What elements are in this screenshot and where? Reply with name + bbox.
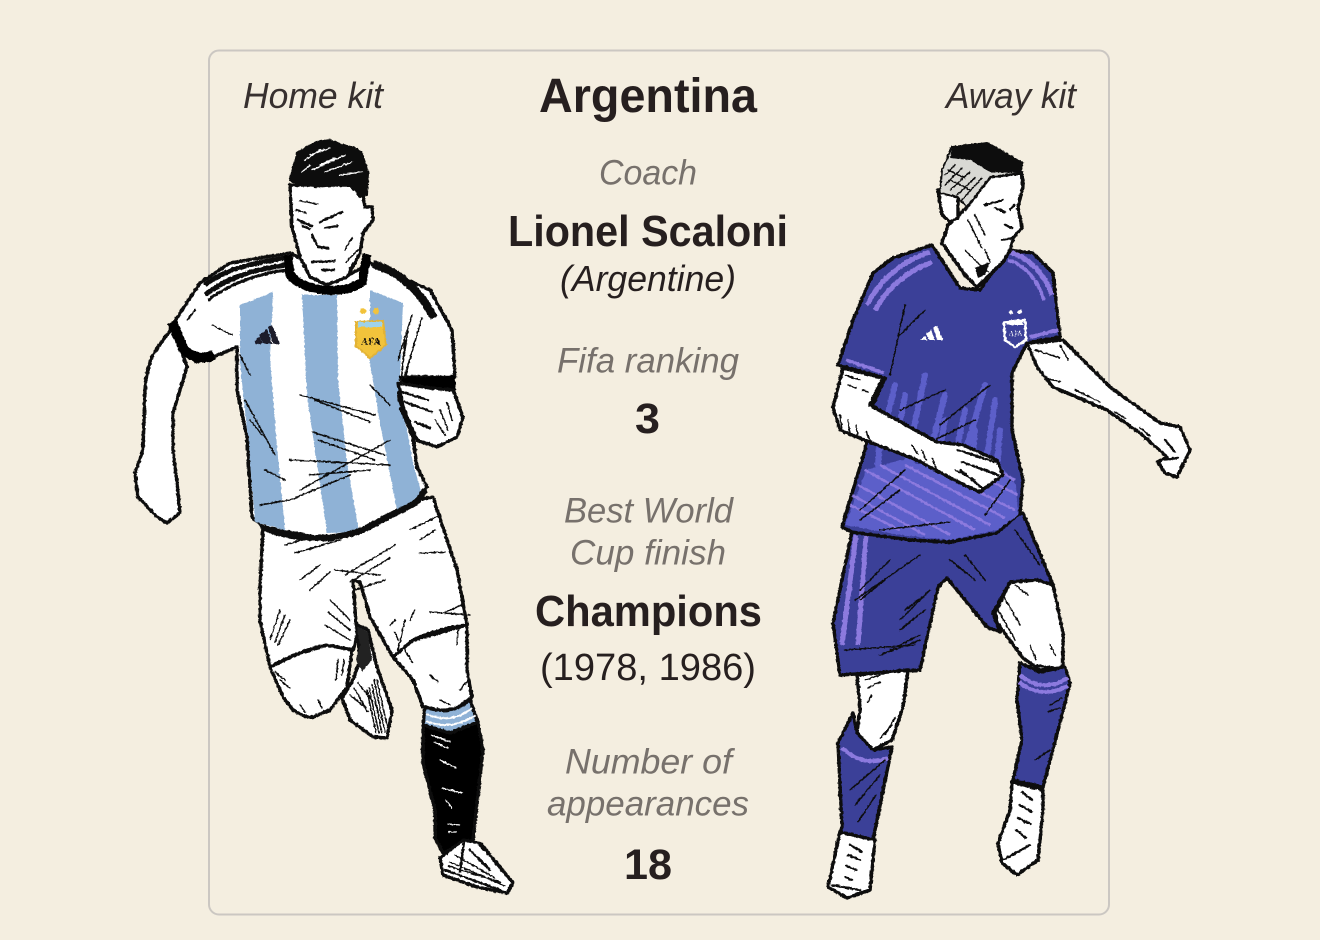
text block: number of appearances: [547, 742, 749, 889]
text block: number of appearances: Number of: [565, 742, 735, 782]
collar: [288, 254, 367, 290]
text block: coach: [508, 154, 788, 299]
ear: [938, 188, 958, 222]
adidas logo: [920, 326, 943, 340]
sleeve stripes: [867, 252, 1052, 310]
bent knee: [270, 645, 352, 717]
heading: away kit: Away kit: [944, 75, 1078, 116]
facial features: [298, 212, 342, 270]
jersey creases: [187, 310, 422, 505]
left boot: [828, 832, 875, 898]
black sock: [423, 722, 483, 853]
illustration: away kit player: [828, 143, 1190, 898]
adidas logo: [254, 325, 280, 344]
crest: AFA: [361, 337, 382, 348]
text block: best world cup finish: Best World: [564, 492, 735, 530]
heading: home kit: Home kit: [243, 75, 385, 116]
left arm: [833, 368, 1003, 492]
title: Argentina: Argentina: [539, 70, 757, 123]
crest: AFA: [1009, 330, 1022, 338]
boot: [440, 840, 513, 893]
shoulder stripes: [205, 258, 287, 295]
text block: coach: (Argentine): [560, 258, 736, 299]
jersey: [172, 253, 455, 540]
knee right: [995, 580, 1063, 670]
neck and face: [942, 173, 1023, 287]
bent leg boot: [342, 625, 392, 738]
hair: [290, 140, 368, 197]
facial features: [985, 200, 1014, 240]
shorts: [833, 513, 1053, 675]
left arm: [135, 327, 187, 523]
text block: number of appearances: 18: [624, 841, 672, 889]
right arm: [1027, 340, 1190, 477]
armbands: [172, 322, 214, 358]
left shin: [857, 670, 908, 750]
sock band: [423, 700, 478, 733]
text block: best world cup finish: [535, 492, 762, 689]
shorts creases: [270, 515, 470, 650]
text block: fifa ranking: Fifa ranking: [557, 342, 740, 380]
hair: [940, 143, 1023, 207]
jersey outline and hem: [237, 347, 417, 517]
boot right: [998, 782, 1043, 875]
text block: fifa ranking: 3: [635, 395, 660, 443]
text block: fifa ranking: [557, 342, 740, 443]
text block: coach: Coach: [599, 154, 697, 192]
fading pattern: [845, 375, 1018, 540]
sock right: [1013, 663, 1070, 787]
text block: best world cup finish: (1978, 1986): [540, 647, 756, 689]
text block: best world cup finish: Champions: [535, 587, 762, 636]
hand: [398, 383, 463, 447]
text block: coach: Lionel Scaloni: [508, 207, 788, 256]
neck and face: [290, 185, 373, 285]
left sock: [838, 713, 892, 840]
jersey: [838, 245, 1060, 542]
crest: [356, 308, 386, 358]
text block: number of appearances: appearances: [547, 784, 749, 824]
shorts: [260, 497, 467, 667]
standing leg: [393, 625, 472, 713]
crest: [1004, 310, 1026, 347]
jersey creases: [860, 305, 1010, 530]
illustration: home kit player: [135, 140, 513, 893]
text block: best world cup finish: Cup finish: [570, 534, 726, 572]
jersey stripes: [240, 290, 422, 533]
panel: team card: [209, 50, 1109, 914]
